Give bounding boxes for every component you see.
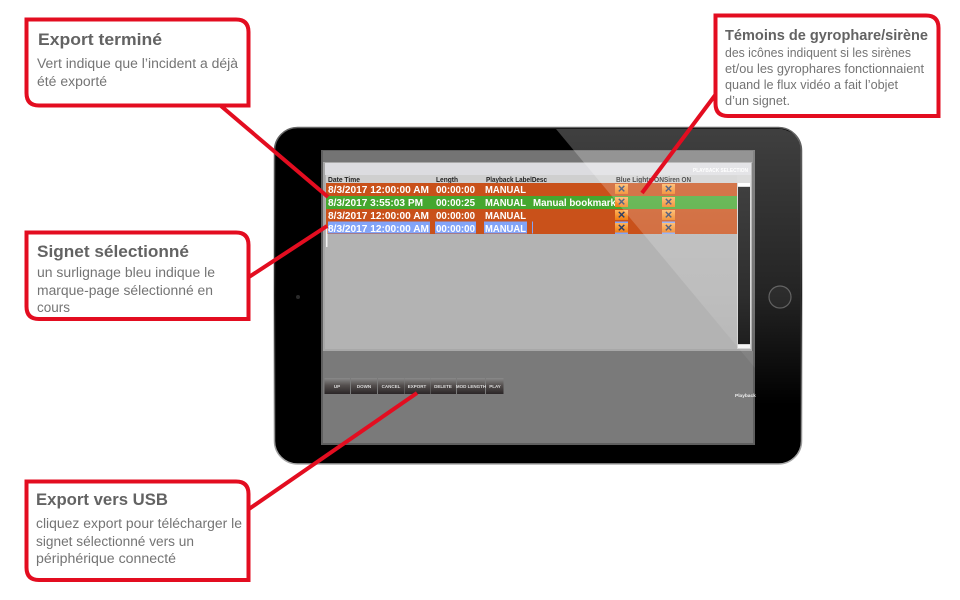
button: up — [324, 378, 350, 394]
row 1: bookmark: 8/3/2017 12:00:00 AM — [328, 184, 429, 196]
button: delete: DELETE — [434, 384, 452, 389]
connector: signet sélectionné — [249, 226, 327, 277]
panel title: PLAYBACK SELECTION — [693, 168, 748, 174]
connector: export vers USB — [249, 393, 417, 509]
blue lights and siren status icons: × — [618, 181, 626, 196]
text block: Vert indique que l’incident a déjà — [37, 56, 238, 71]
row 4: selected bookmark in blue: 8/3/2017 12:00:00 AM — [328, 223, 429, 235]
table header: Length — [436, 177, 458, 184]
text block: marque-page sélectionné en — [37, 283, 213, 298]
heading: Export vers USB — [36, 490, 168, 509]
button: play — [486, 378, 504, 394]
button: up: UP — [334, 384, 340, 389]
blue lights and siren status icons — [615, 181, 675, 235]
tablet screen — [321, 150, 756, 445]
row 3: bookmark: MANUAL — [485, 210, 527, 222]
text block: un surlignage bleu indique le — [37, 265, 215, 280]
row 3: bookmark: 00:00:00 — [436, 210, 475, 222]
blue lights and siren status icons: × — [665, 194, 673, 209]
button: play: PLAY — [489, 384, 501, 389]
row 1: bookmark: 00:00:00 — [436, 184, 475, 196]
blue lights and siren status icons: × — [665, 220, 673, 235]
scrollbar — [737, 175, 751, 349]
row 4: selected bookmark in blue: 00:00:00 — [436, 223, 475, 235]
connector: export terminé — [221, 106, 328, 197]
button: cancel — [378, 378, 404, 394]
row 4: selected bookmark in blue — [326, 222, 737, 235]
button: down: DOWN — [357, 384, 371, 389]
text block: cours — [37, 300, 70, 315]
icon: front camera — [296, 295, 300, 299]
button bar — [324, 378, 504, 394]
tablet device — [274, 128, 802, 464]
heading: Signet sélectionné — [37, 242, 189, 261]
row 2: exported bookmark in green: 8/3/2017 3:55:03 PM — [328, 197, 423, 209]
row 2: exported bookmark in green — [326, 196, 737, 209]
row 4: selected bookmark in blue: MANUAL — [485, 223, 527, 235]
panel: playback selection — [323, 162, 752, 351]
text block: d’un signet. — [725, 94, 790, 108]
button: cancel: CANCEL — [382, 384, 401, 389]
text block: cliquez export pour télécharger le — [36, 516, 242, 531]
callout: export terminé — [26, 20, 248, 106]
row 2: exported bookmark in green: Manual bookmark — [533, 197, 616, 209]
icon: home button — [769, 286, 791, 308]
row 3: bookmark: 8/3/2017 12:00:00 AM — [328, 210, 429, 222]
button: delete — [430, 378, 456, 394]
text block: signet sélectionné vers un — [36, 534, 194, 549]
blue lights and siren status icons: × — [618, 207, 626, 222]
heading: Témoins de gyrophare/sirène — [725, 27, 928, 44]
text block: périphérique connecté — [36, 551, 176, 566]
callout: témoins de gyrophare/sirène — [716, 16, 938, 116]
table header: Siren ON — [664, 177, 691, 184]
button: export — [404, 378, 430, 394]
blue lights and siren status icons: × — [618, 220, 626, 235]
blue lights and siren status icons: × — [665, 181, 673, 196]
row 2: exported bookmark in green: 00:00:25 — [436, 197, 475, 209]
blue lights and siren status icons: × — [618, 194, 626, 209]
button: mod length: MOD LENGTH — [456, 384, 486, 389]
callout: signet sélectionné — [26, 232, 248, 319]
table header: Blue Lights ON — [616, 177, 664, 184]
text block: des icônes indiquent si les sirènes — [725, 46, 911, 60]
button: down — [351, 378, 377, 394]
callout: export vers USB — [26, 482, 248, 580]
connector: témoins de gyrophare — [642, 94, 716, 193]
table header: Date Time — [328, 177, 360, 184]
row 3: bookmark — [326, 209, 737, 222]
heading: Export terminé — [38, 30, 162, 49]
button: mod length — [456, 378, 486, 394]
table header: Playback LabelDesc — [486, 177, 547, 184]
button: export: EXPORT — [408, 384, 426, 389]
text block: quand le flux vidéo a fait l’objet — [725, 78, 899, 92]
text block: et/ou les gyrophares fonctionnaient — [725, 62, 925, 76]
row 1: bookmark: MANUAL — [485, 184, 527, 196]
playback label: Playback — [735, 393, 756, 399]
row 2: exported bookmark in green: MANUAL — [485, 197, 527, 209]
lower control area — [323, 351, 753, 443]
blue lights and siren status icons: × — [665, 207, 673, 222]
table header — [326, 175, 737, 184]
text block: été exporté — [37, 74, 107, 89]
screen glare — [556, 129, 801, 405]
row 1: bookmark — [326, 183, 737, 196]
